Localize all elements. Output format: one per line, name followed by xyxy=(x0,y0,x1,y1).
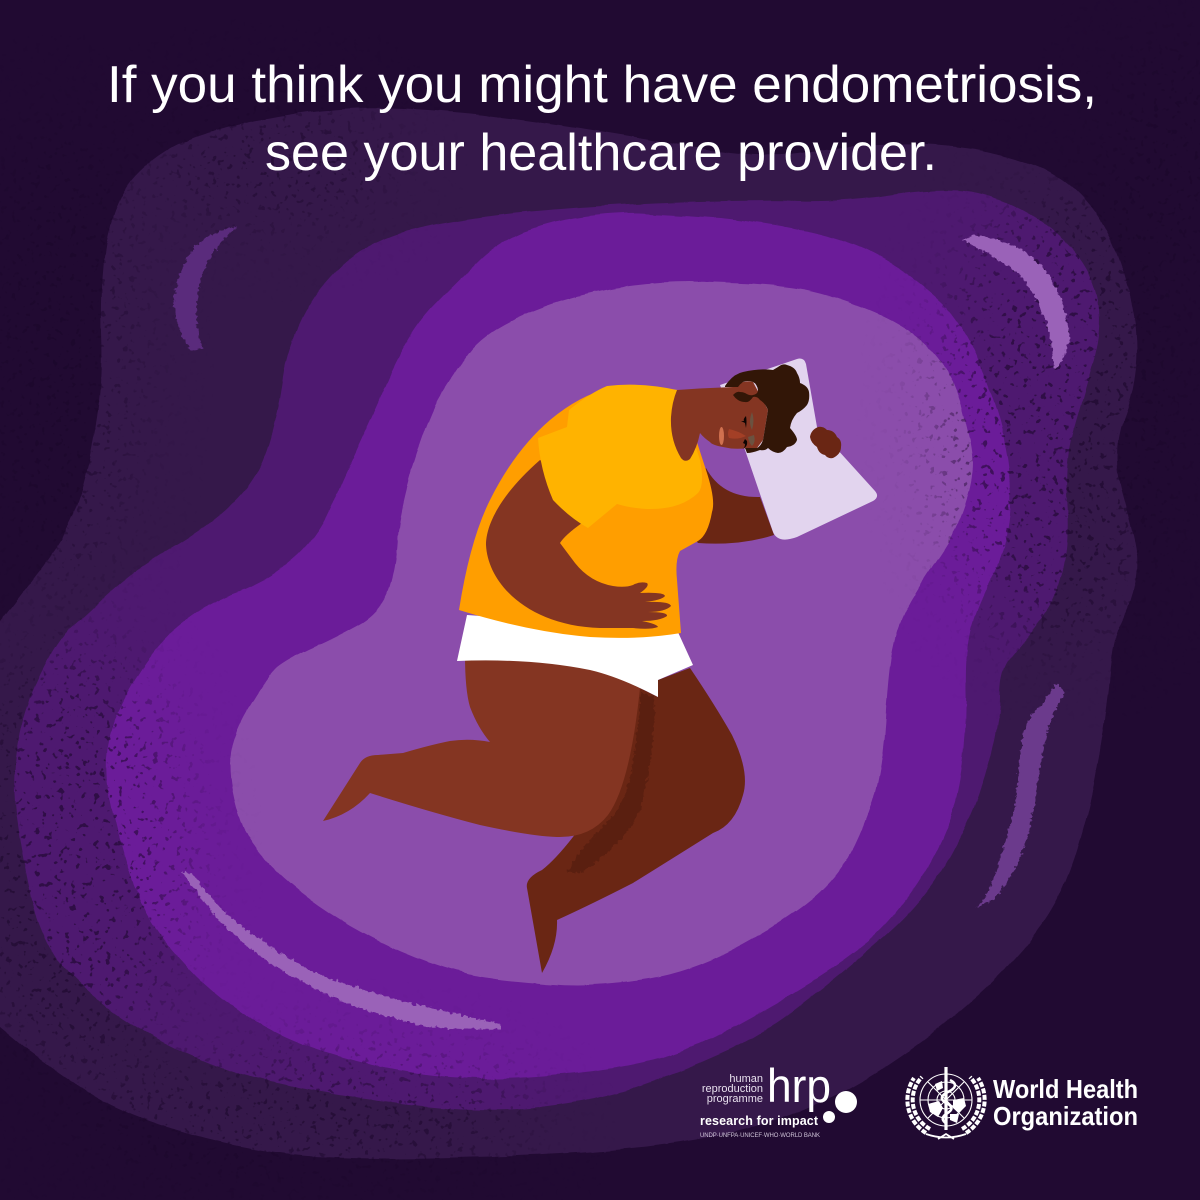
title: If you think you might have endometriosis, xyxy=(107,56,1097,114)
blob: inner layer xyxy=(230,282,973,985)
pillow xyxy=(720,359,877,540)
brows xyxy=(748,412,755,446)
laurel wreath xyxy=(907,1077,985,1133)
globe xyxy=(920,1074,972,1126)
staff and serpent xyxy=(944,1067,948,1130)
streak: top right xyxy=(962,235,1069,370)
HRP programme name: human xyxy=(729,1073,763,1085)
leg shadow texture xyxy=(567,693,655,872)
title xyxy=(107,56,1097,182)
head and neck xyxy=(671,381,768,461)
blob: second layer xyxy=(14,190,1099,1110)
shorts xyxy=(457,615,693,697)
streak: bottom left xyxy=(182,872,501,1029)
continents xyxy=(928,1081,966,1123)
woman curled up in pain xyxy=(323,359,877,973)
face details xyxy=(719,412,755,449)
sleeve xyxy=(538,385,702,528)
HRP programme name: programme xyxy=(707,1093,763,1105)
eyes xyxy=(741,416,747,449)
streak: right xyxy=(975,683,1065,908)
front arm with hand xyxy=(486,460,671,629)
HRP programme name: reproduction xyxy=(702,1083,763,1095)
shirt body xyxy=(459,388,713,638)
ribbon xyxy=(926,1134,966,1139)
title: see your healthcare provider. xyxy=(265,124,937,182)
WHO logo xyxy=(907,1067,1138,1139)
HRP logo xyxy=(700,1059,857,1139)
streak: top left xyxy=(174,227,237,350)
hair xyxy=(725,364,809,453)
back arm xyxy=(680,468,774,544)
front leg xyxy=(323,655,640,837)
HRP sponsors: UNDP·UNFPA·UNICEF·WHO·WORLD BANK xyxy=(700,1133,820,1139)
HRP wordmark: hrp xyxy=(767,1059,831,1112)
blob: third layer xyxy=(106,213,1011,1079)
hand on pillow xyxy=(810,427,841,458)
brush streaks xyxy=(174,227,1069,1029)
HRP programme name xyxy=(702,1073,763,1105)
lips xyxy=(719,427,724,445)
HRP tagline: research for impact xyxy=(700,1114,819,1128)
nose shadow xyxy=(728,429,746,439)
WHO wordmark: Organization xyxy=(993,1101,1138,1131)
back leg xyxy=(527,668,745,973)
WHO wordmark: World Health xyxy=(993,1074,1138,1104)
WHO emblem xyxy=(907,1067,985,1139)
WHO wordmark xyxy=(993,1074,1138,1131)
HRP dots xyxy=(823,1091,857,1123)
